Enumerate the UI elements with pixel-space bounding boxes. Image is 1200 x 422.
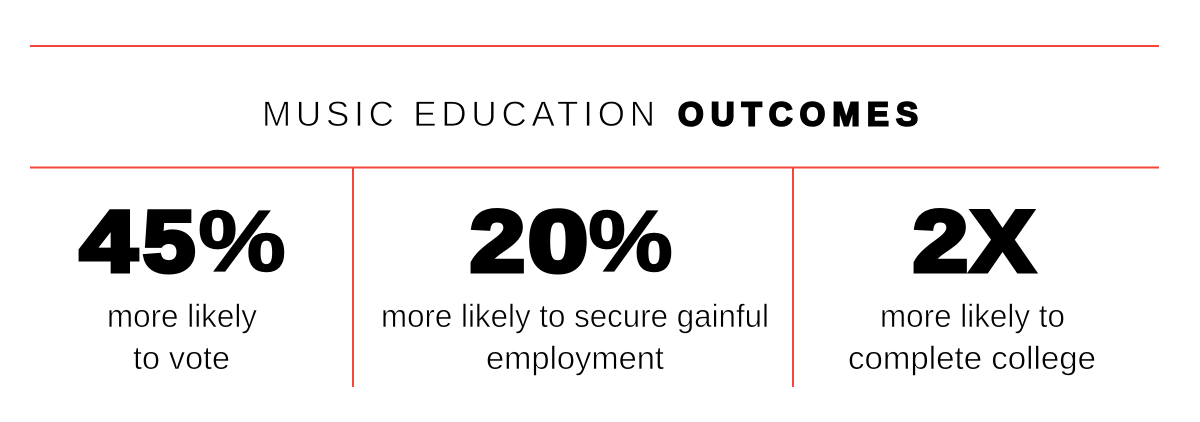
statistic: 45%: % [198, 194, 286, 290]
statistic: 2X: X [971, 194, 1034, 290]
statistic: 45%: 4 [80, 194, 137, 290]
statistic: 45% [80, 194, 286, 290]
statistic: 20%: 2 [470, 194, 525, 290]
statistic: 2X: 2 [913, 194, 968, 290]
statistic: 20% [470, 194, 673, 290]
description: more likely to complete college [848, 298, 1096, 376]
description: more likely to vote: more likely [107, 298, 257, 334]
panel: college [848, 194, 1096, 376]
statistic: 2X [913, 194, 1034, 290]
title: MUSIC EDUCATION [262, 95, 655, 134]
panel: employment [381, 194, 769, 376]
description: more likely to secure gainful employment [381, 298, 769, 376]
statistic: 20%: 0 [528, 194, 588, 290]
column divider right [792, 167, 794, 387]
description: more likely to secure gainful employment: employment [486, 340, 664, 376]
header rule [30, 166, 1159, 168]
panel: vote [80, 194, 286, 376]
title [262, 95, 918, 134]
top rule [30, 45, 1159, 47]
description: more likely to complete college: complete college [848, 340, 1096, 376]
column divider left [352, 167, 354, 387]
title: OUTCOMES [678, 96, 918, 132]
statistic: 45%: 5 [143, 194, 195, 290]
statistic: 20%: % [588, 194, 673, 290]
description: more likely to secure gainful employment: more likely to secure gainful [381, 298, 769, 334]
description: more likely to vote: to vote [133, 340, 230, 376]
description: more likely to complete college: more likely to [880, 298, 1065, 334]
description: more likely to vote [107, 298, 257, 376]
